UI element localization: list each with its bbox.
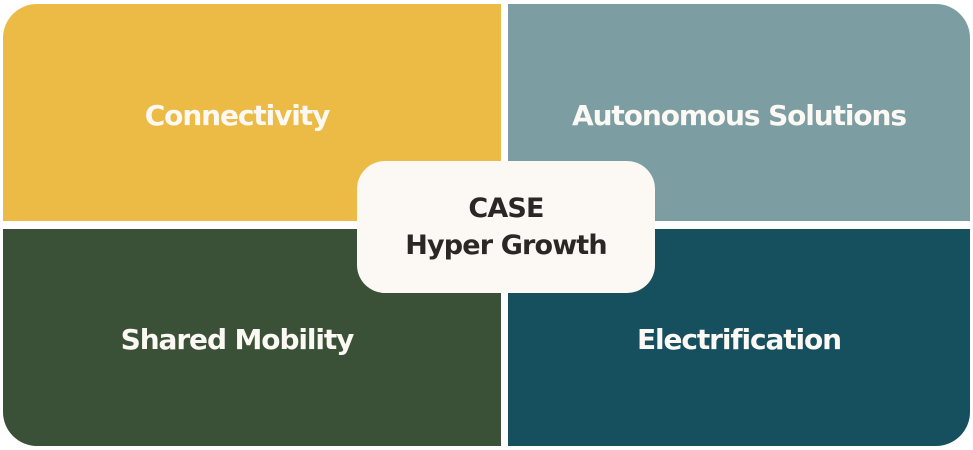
- center callout: CASE Hyper Growth: [357, 161, 655, 293]
- panel: Autonomous Solutions: [508, 4, 970, 221]
- panel: Connectivity: Connectivity: [145, 98, 329, 132]
- panel: Shared Mobility: [3, 229, 501, 446]
- panel: Electrification: [508, 229, 970, 446]
- panel: Autonomous Solutions: Autonomous Solutions: [572, 98, 906, 132]
- center callout: CASE Hyper Growth: Hyper Growth: [405, 230, 607, 260]
- panel: Connectivity: [3, 4, 501, 221]
- center callout: CASE Hyper Growth: CASE: [468, 192, 544, 224]
- panel: Shared Mobility: Shared Mobility: [121, 323, 353, 356]
- panel: Electrification: Electrification: [637, 323, 841, 356]
